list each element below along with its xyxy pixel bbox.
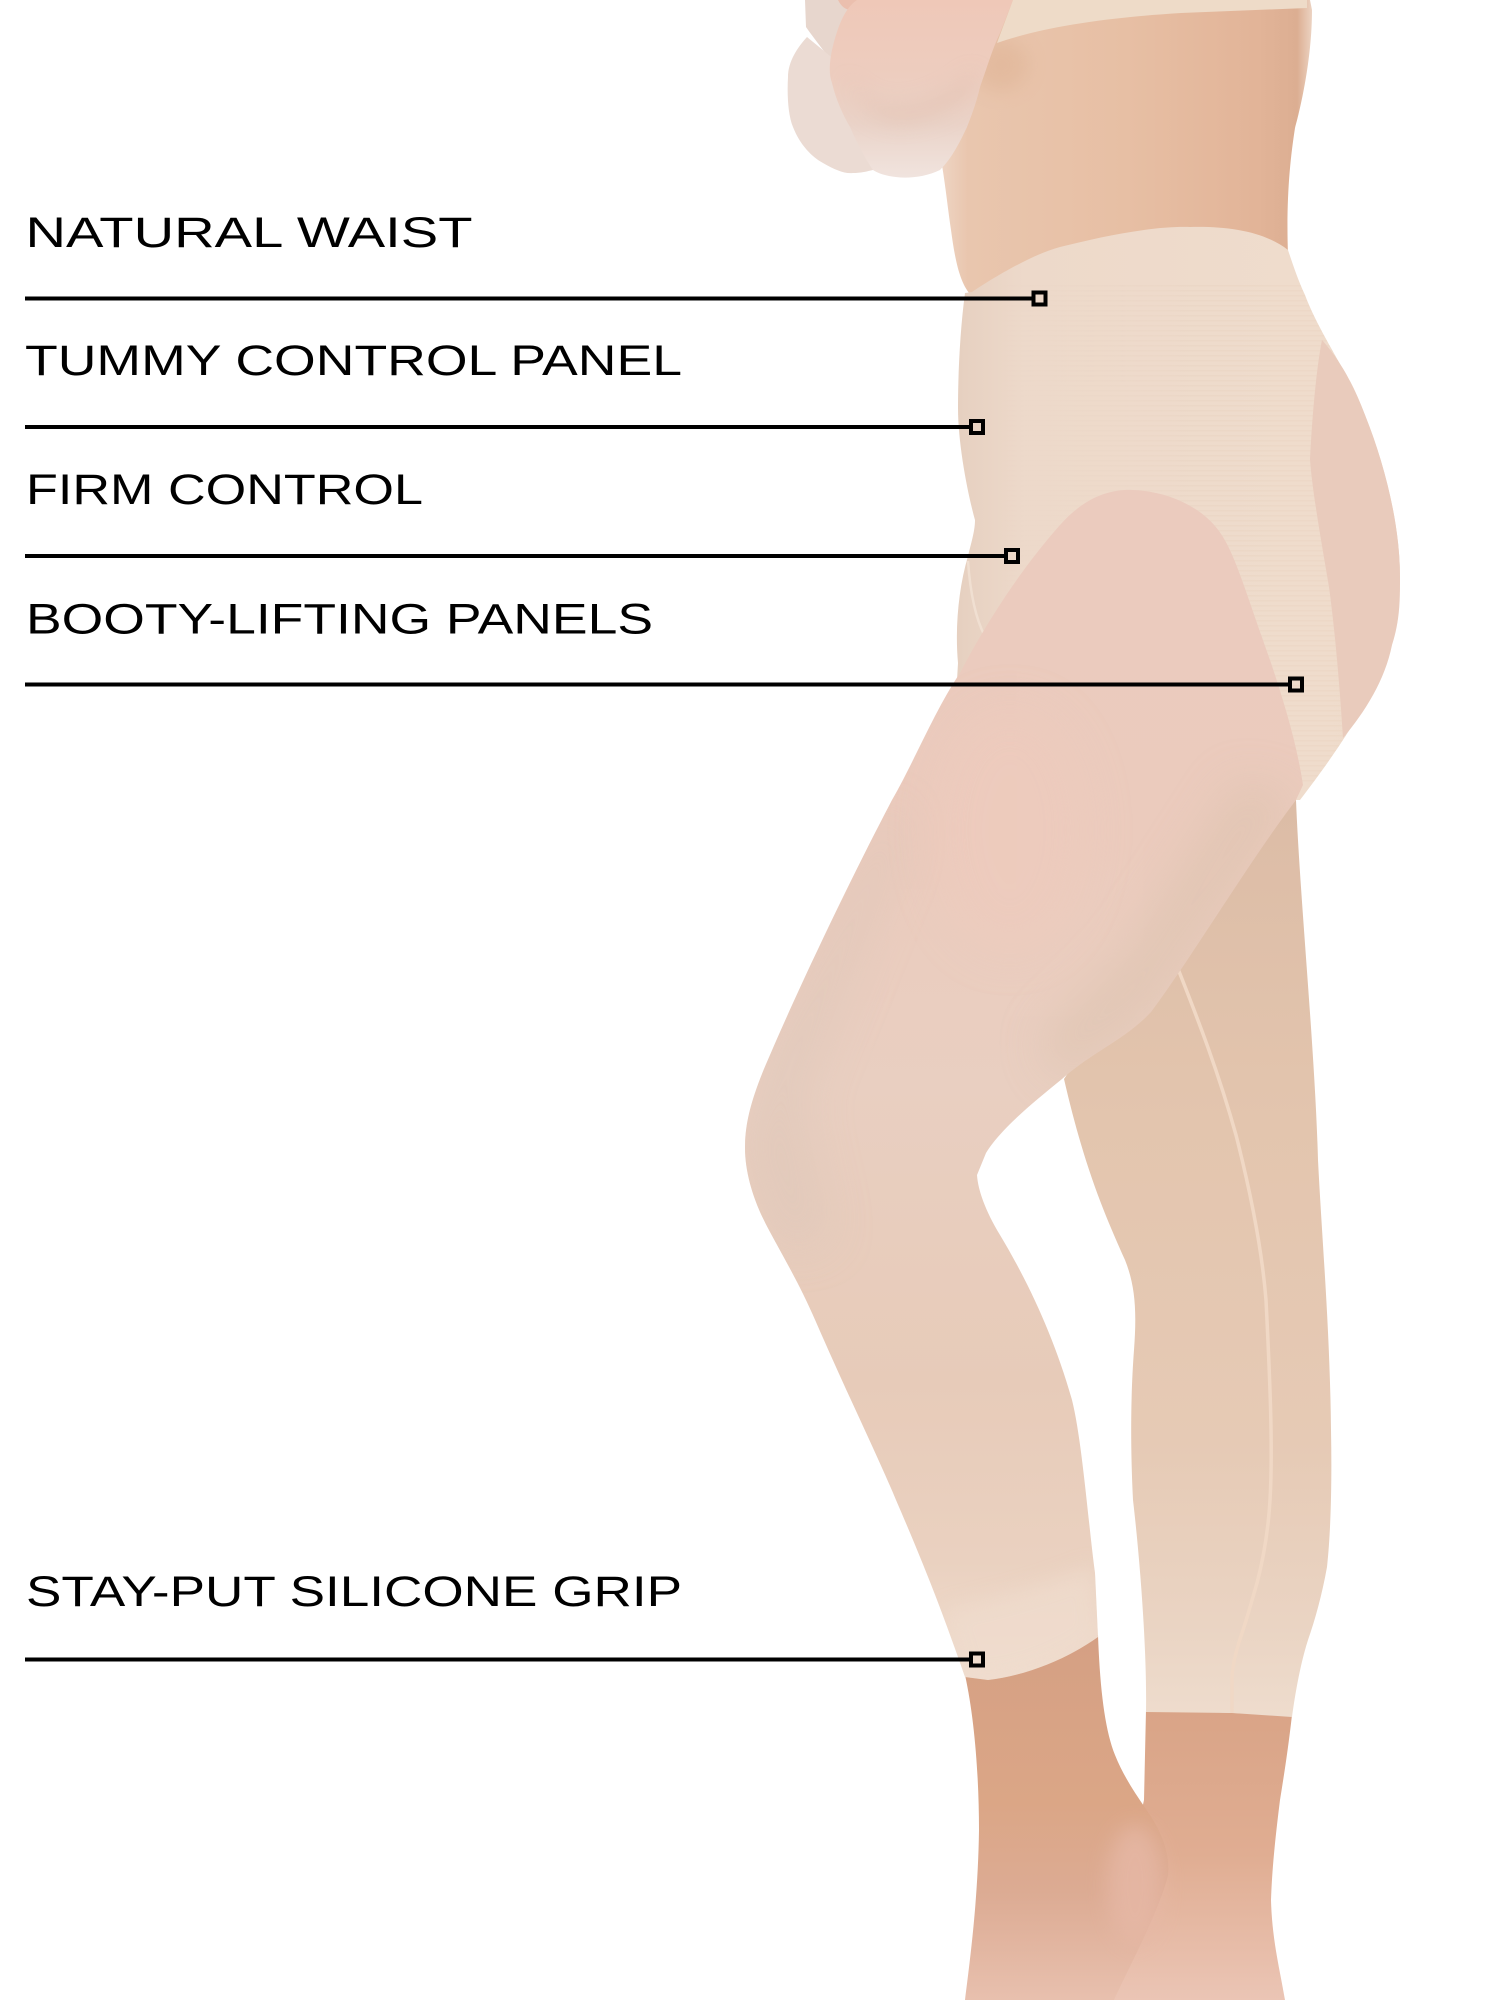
- marker: [1006, 550, 1018, 562]
- label: BOOTY-LIFTING PANELS: [26, 596, 653, 644]
- model figure wearing shapewear: [745, 0, 1400, 2000]
- opaque high-waist panel: [950, 227, 1400, 800]
- callout: tummy control panel: [25, 337, 983, 433]
- front foot and ankle: [965, 1635, 1168, 2000]
- callout: booty-lifting panels: [25, 596, 1302, 690]
- heel highlight: [1107, 1825, 1163, 1945]
- callout: natural waist: [25, 209, 1046, 304]
- bra band: [997, 0, 1307, 43]
- label: FIRM CONTROL: [26, 466, 423, 514]
- label: TUMMY CONTROL PANEL: [25, 337, 682, 385]
- marker: [971, 1654, 983, 1666]
- underarm shadow: [972, 39, 1028, 91]
- leader line: [25, 554, 1005, 558]
- arm base: [830, 0, 1013, 178]
- back leg seam: [1175, 961, 1271, 1713]
- callout: stay-put silicone grip: [25, 1568, 983, 1666]
- upper arm and elbow: [830, 0, 1013, 178]
- marker: [1034, 292, 1046, 304]
- back foot and ankle: [1100, 1710, 1292, 2000]
- front leg sheer legging: [745, 490, 1303, 1680]
- label: STAY-PUT SILICONE GRIP: [26, 1568, 682, 1616]
- fingertip: [838, 0, 857, 10]
- callout: firm control: [25, 466, 1018, 562]
- hand: [805, 0, 860, 62]
- label: NATURAL WAIST: [26, 209, 472, 257]
- crease shadow: [892, 104, 940, 116]
- back leg sheer legging: [1064, 800, 1331, 1717]
- forearm: [788, 37, 880, 173]
- silicone grip band: [944, 1565, 1098, 1680]
- marker: [1290, 678, 1302, 690]
- leg shading: [1072, 853, 1230, 1044]
- ribbed knit texture: [950, 285, 1350, 785]
- elbow shading: [892, 104, 940, 116]
- marker: [971, 421, 983, 433]
- leader line: [25, 425, 970, 429]
- torso skin: [942, 0, 1312, 296]
- crotch seam: [968, 561, 987, 640]
- sheer booty-lifting panel: [1310, 340, 1400, 738]
- leader line: [25, 682, 1289, 686]
- leader line: [25, 1658, 970, 1662]
- leader line: [25, 296, 1032, 300]
